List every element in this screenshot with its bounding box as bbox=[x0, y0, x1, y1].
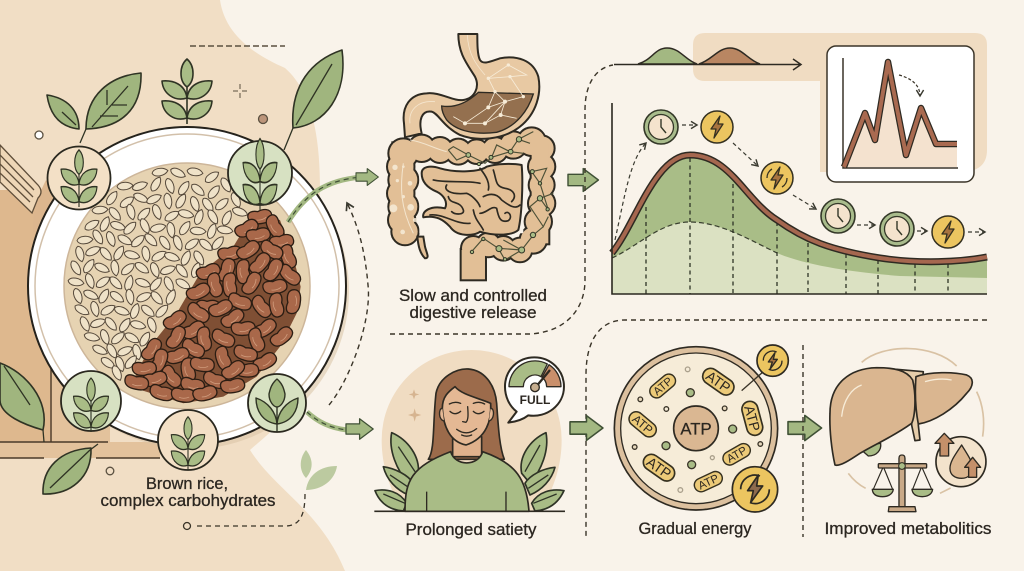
ATP pill 5 bbox=[640, 451, 678, 484]
gauge bbox=[509, 361, 547, 387]
dashed connector: lower row bbox=[586, 320, 987, 537]
ATP pill 4: ATP bbox=[741, 404, 763, 433]
foliage bbox=[375, 433, 564, 511]
ligament bbox=[897, 369, 923, 441]
stomach network bbox=[410, 35, 527, 125]
nucleus: ATP bbox=[680, 419, 712, 438]
icon: large leaf top right bbox=[284, 50, 343, 150]
time gridlines bbox=[646, 158, 948, 294]
hair bbox=[428, 369, 504, 459]
label: digestive release: digestive release bbox=[410, 303, 536, 322]
badge: sprig lower left bbox=[61, 371, 121, 432]
decorative dots and sparkle bbox=[35, 46, 285, 475]
arrow: digestion to chart bbox=[568, 169, 598, 191]
satiety speech bubble: FULL bbox=[520, 393, 550, 407]
ATP pill 7 bbox=[692, 469, 725, 494]
ATP pill 7: ATP bbox=[697, 473, 721, 492]
icon: bolt 2 with cycle arcs bbox=[761, 162, 793, 194]
orbit ring bbox=[848, 349, 984, 493]
baseline area bbox=[612, 222, 987, 294]
arrow: satiety to energy bbox=[570, 416, 603, 440]
label: improved metabolitics: Improved metabolitics bbox=[824, 519, 992, 538]
divider bbox=[802, 345, 804, 537]
appendix bbox=[417, 237, 428, 258]
panel: spike comparison backdrop bbox=[693, 33, 987, 172]
small intestine bbox=[422, 164, 522, 235]
badge: herb lower right bbox=[248, 374, 306, 432]
liver left lobe bbox=[830, 368, 915, 465]
facial features bbox=[449, 402, 485, 436]
chart axes bbox=[612, 103, 987, 294]
energy medallion large bbox=[732, 467, 778, 512]
baseline dashed curve bbox=[612, 222, 777, 258]
icon: leaf lower left bbox=[0, 363, 44, 442]
metabolic badge bbox=[935, 433, 986, 487]
icon: leaf below plate bbox=[43, 444, 98, 494]
face bbox=[442, 387, 491, 445]
large intestine bbox=[388, 128, 554, 279]
icon: clock 3 bbox=[880, 212, 914, 246]
organelles bbox=[632, 367, 763, 492]
gallbladder bbox=[863, 443, 881, 456]
balance scale bbox=[872, 455, 933, 512]
icon: pale leaf and dashed label line bbox=[184, 450, 337, 530]
badge: sprig upper right bbox=[228, 138, 292, 210]
icon: top sprig bbox=[162, 59, 212, 124]
arrow: energy to metabolism bbox=[788, 415, 822, 441]
energy medallion small bbox=[757, 345, 788, 376]
label: brown rice: Brown rice, bbox=[146, 474, 228, 493]
plate bbox=[28, 127, 349, 449]
ATP pill 6 bbox=[720, 441, 753, 468]
arrow: plate to digestion bbox=[288, 169, 378, 222]
colon network bbox=[448, 132, 553, 260]
response curve line bbox=[612, 155, 987, 262]
ATP pill 2: ATP bbox=[703, 368, 734, 396]
chart step arrows bbox=[615, 125, 985, 240]
ATP pill 5: ATP bbox=[644, 454, 674, 482]
arrow: dashed feedback bbox=[329, 203, 368, 405]
cell membrane bbox=[614, 347, 778, 510]
ATP pill 2 bbox=[700, 365, 737, 398]
arrow: plate to satiety bbox=[307, 412, 373, 439]
badge: sprig upper left bbox=[48, 146, 110, 210]
label: gradual energy: Gradual energy bbox=[638, 519, 752, 538]
icon: bolt 1 bbox=[701, 111, 733, 143]
icon: bolt 3 bbox=[932, 216, 964, 248]
inset chart: glucose spikes bbox=[827, 46, 974, 182]
icon: leaf pair top left bbox=[47, 73, 141, 143]
backdrop circle bbox=[382, 350, 562, 511]
background blob: left beige bbox=[0, 0, 345, 571]
ears bbox=[440, 408, 493, 421]
connector to bolt bbox=[742, 372, 763, 391]
label: brown rice: complex carbohydrates bbox=[100, 491, 276, 510]
icon: clock 1 bbox=[644, 110, 678, 144]
ATP pill 1 bbox=[647, 371, 678, 401]
ground line bbox=[374, 509, 565, 514]
ATP pill 3: ATP bbox=[629, 412, 656, 437]
liver highlights bbox=[842, 379, 952, 417]
illustration: liver and metabolism bbox=[830, 349, 986, 512]
stomach contents bbox=[442, 92, 533, 133]
label: digestive release: Slow and controlled bbox=[399, 286, 547, 305]
ATP pill 3 bbox=[626, 409, 659, 440]
neck bbox=[453, 437, 482, 457]
mini chart: two humps timeline bbox=[614, 48, 801, 70]
sparkles bbox=[408, 389, 421, 422]
ATP pill 1: ATP bbox=[651, 375, 675, 398]
ascending colon sparkle bbox=[389, 140, 447, 234]
nucleus bbox=[674, 406, 718, 451]
table and fork scene bbox=[0, 145, 160, 458]
dashed connector: digestion to chart bbox=[390, 65, 613, 334]
satiety speech bubble bbox=[505, 357, 564, 423]
badge: sprig bottom bbox=[158, 410, 218, 470]
illustration: ATP cell bbox=[614, 345, 788, 512]
stomach bbox=[404, 34, 539, 139]
illustration: person with satiety bbox=[374, 350, 565, 511]
network nodes bbox=[466, 137, 549, 261]
icon: clock 2 bbox=[821, 199, 855, 233]
liver right lobe bbox=[915, 373, 972, 424]
digestive system bbox=[388, 34, 554, 279]
sweater bbox=[405, 452, 529, 511]
label: prolonged satiety: Prolonged satiety bbox=[406, 520, 537, 539]
kidney beans bbox=[124, 208, 303, 403]
curve area bbox=[612, 155, 987, 294]
chart: sustained glucose curve bbox=[612, 103, 987, 294]
brown rice bbox=[67, 166, 249, 382]
ATP pill 6: ATP bbox=[725, 445, 749, 466]
